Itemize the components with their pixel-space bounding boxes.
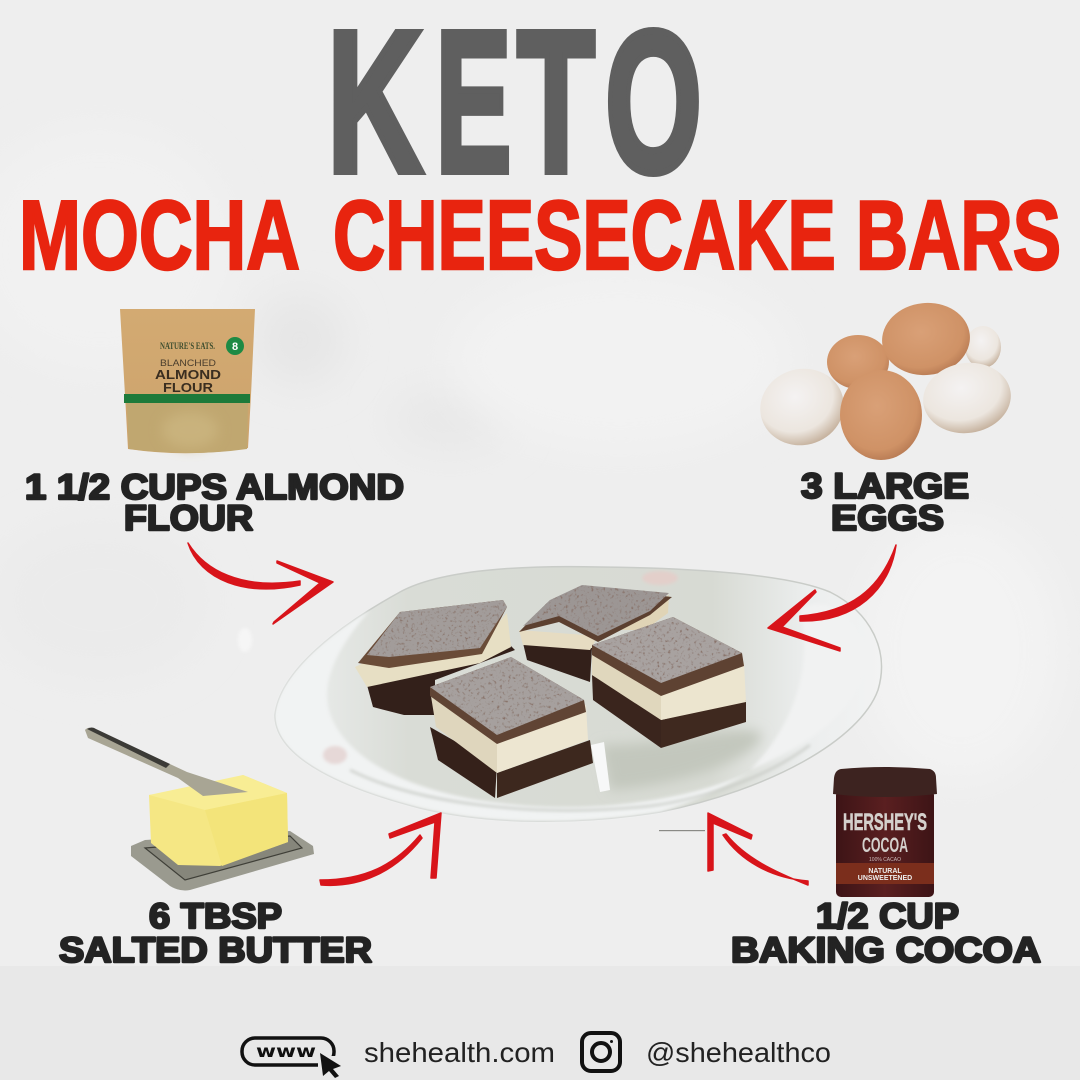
ingredient: cocoa can: HERSHEY'S: [843, 809, 927, 836]
tray: [131, 831, 314, 890]
thin line near cocoa arrow: [659, 830, 705, 831]
label: almond flour: FLOUR: [124, 499, 253, 538]
ingredient: almond flour bag: 8: [232, 341, 238, 353]
label: eggs: 3 LARGE: [801, 467, 969, 506]
label: butter: SALTED BUTTER: [59, 931, 372, 970]
icon: website: www: [256, 1042, 316, 1062]
ingredient: almond flour bag: ALMOND: [155, 367, 221, 382]
ingredient: cocoa can: [833, 767, 937, 897]
ingredient: cocoa can: NATURAL: [868, 868, 902, 875]
subtitle: Mocha Cheesecake Bars: MOCHA: [19, 180, 300, 290]
ingredient: almond flour bag: BLANCHED: [160, 358, 216, 369]
arrow: almond flour to plate: [188, 543, 333, 624]
subtitle: Mocha Cheesecake Bars: [19, 180, 1061, 290]
label: cocoa: [731, 897, 1041, 970]
ingredient: butter: [85, 728, 314, 890]
label: butter: [59, 897, 372, 970]
plate: [275, 567, 881, 821]
bar: left: [355, 600, 515, 715]
website text: shehealth.com: [364, 1037, 555, 1068]
block: [149, 775, 288, 866]
icon: instagram: [582, 1033, 620, 1071]
label: cocoa: 1/2 CUP: [816, 897, 959, 936]
ingredient: almond flour bag: FLOUR: [163, 380, 214, 395]
arrow: cocoa to plate: [708, 813, 808, 885]
bar: right: [592, 617, 746, 748]
label: eggs: EGGS: [831, 499, 944, 538]
ingredient: almond flour bag: NATURE'S EATS.: [160, 341, 215, 351]
plate with cheesecake bars: [275, 567, 881, 821]
label: eggs: [801, 467, 969, 538]
label: almond flour: [25, 468, 404, 538]
footer: [242, 1033, 831, 1078]
bar: front: [430, 657, 593, 798]
ingredient: cocoa can: 100% CACAO: [869, 857, 901, 863]
ingredient: cocoa can: UNSWEETENED: [858, 875, 912, 882]
arrow: eggs to plate: [768, 545, 896, 651]
ingredient: almond flour bag: [120, 309, 255, 453]
label: almond flour: 1 1/2 CUPS ALMOND: [25, 468, 404, 507]
bar: back: [519, 585, 672, 682]
knife: [85, 728, 248, 796]
ingredient: cocoa can: COCOA: [862, 834, 908, 857]
instagram handle: @shehealthco: [646, 1037, 831, 1068]
icon: website: [242, 1038, 341, 1078]
arrow: butter to plate: [320, 813, 441, 885]
label: cocoa: BAKING COCOA: [731, 931, 1041, 970]
ingredient: eggs: [752, 299, 1015, 460]
label: butter: 6 TBSP: [149, 897, 282, 936]
title: KETO: [327, 0, 702, 214]
